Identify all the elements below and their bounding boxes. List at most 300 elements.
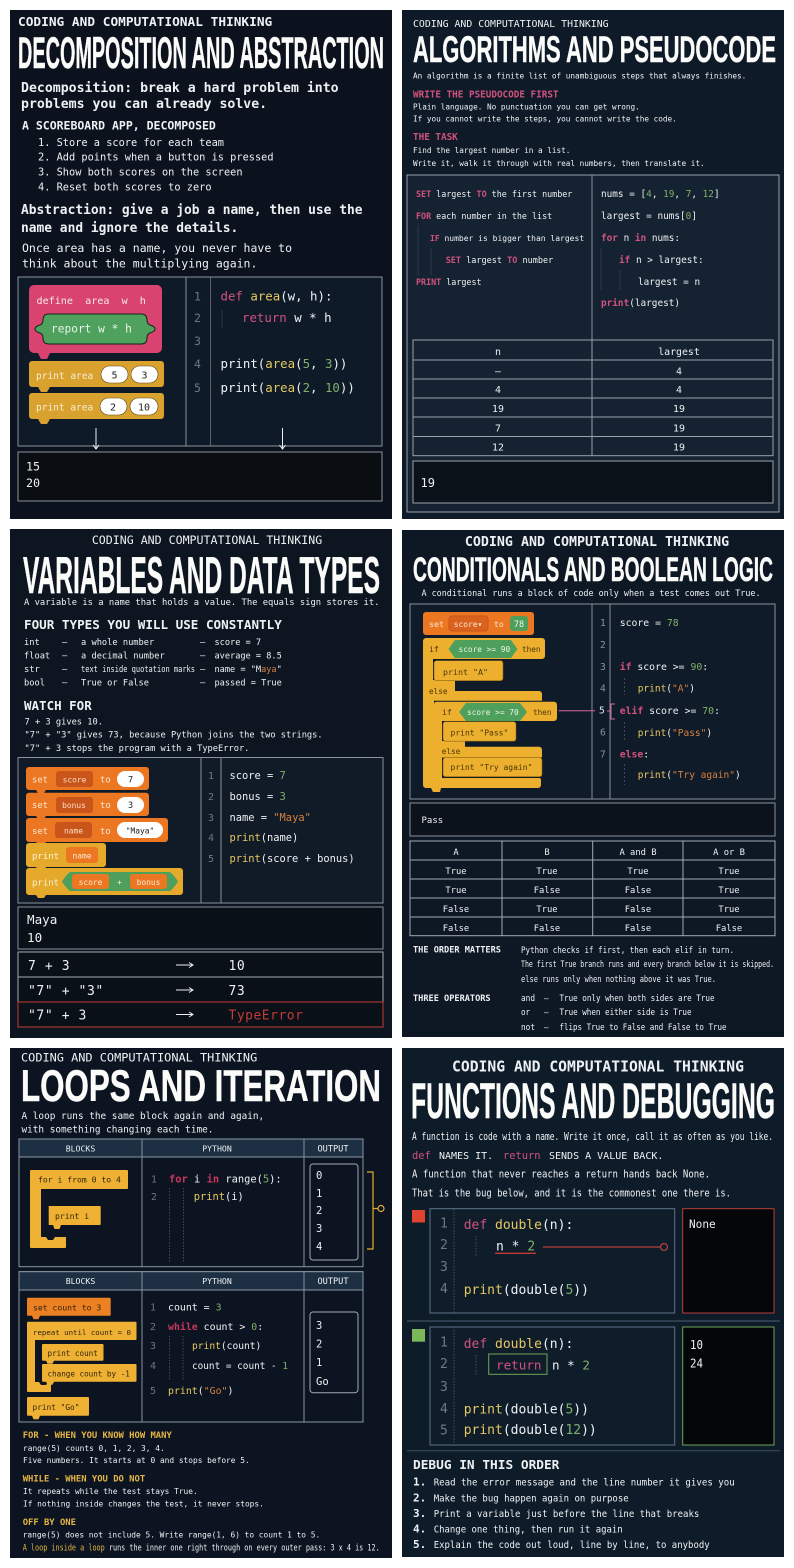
- while loop table: PYTHON: [202, 1276, 232, 1286]
- trace table: [413, 340, 773, 456]
- types table: –: [62, 665, 68, 675]
- none explanation: A function that never reaches a return hands back None.: [412, 1170, 710, 1181]
- block: print score + bonus: [26, 868, 183, 898]
- block: print name: [26, 843, 106, 870]
- block: set bonus: to: [100, 801, 111, 811]
- truth table: False: [534, 886, 560, 896]
- pseudocode text: Plain language. No punctuation you can get wrong.: [413, 103, 640, 112]
- python while loop: [150, 1303, 288, 1397]
- pseudocode: PRINT largest: [416, 277, 482, 287]
- buggy code box: n * 2: [496, 1240, 535, 1255]
- fixed output: [683, 1327, 774, 1445]
- block: inner if: [442, 703, 552, 721]
- block: print name: print: [32, 852, 59, 862]
- truth table: False: [625, 886, 651, 896]
- line numbers: 5: [599, 705, 605, 716]
- pseudocode: [416, 189, 584, 287]
- note: for: [23, 1431, 250, 1465]
- python while loop: 2: [150, 1322, 156, 1333]
- block: else: else: [429, 687, 448, 696]
- python for loop: print(i): [194, 1191, 244, 1203]
- block: define area: define area w h: [36, 296, 146, 307]
- truth table: True: [445, 886, 467, 896]
- kicker: CODING AND COMPUTATIONAL THINKING: [92, 533, 322, 547]
- note: the order matters: THE ORDER MATTERS: [413, 946, 501, 956]
- python while loop: 1: [150, 1303, 156, 1314]
- text: VARIABLES AND DATA TYPES: [23, 547, 380, 605]
- types table: int: [24, 638, 40, 648]
- none explanation: [412, 1170, 731, 1200]
- python for loop: 2: [151, 1192, 157, 1203]
- types table: passed = True: [214, 679, 282, 689]
- icon: red square: [412, 1210, 425, 1222]
- for loop table: BLOCKS: [66, 1144, 95, 1154]
- truth table: A and B: [619, 848, 657, 858]
- types table: True or False: [81, 679, 149, 689]
- truth table: True: [536, 867, 558, 877]
- buggy code box: 3: [440, 1260, 448, 1275]
- note: three operators: not: [521, 1022, 535, 1032]
- fixed code box: 2: [440, 1357, 448, 1372]
- block: set name: set: [32, 827, 48, 837]
- note: the order matters: Python checks if first, then each elif in turn.: [521, 945, 734, 955]
- output list: 3: [316, 1223, 322, 1235]
- block: print Go: [27, 1397, 89, 1419]
- python while loop: 5: [150, 1386, 156, 1397]
- intro: A conditional runs a block of code only when a test comes out True.: [421, 588, 761, 598]
- python code: bonus = 3: [230, 791, 286, 803]
- line numbers: 4: [194, 357, 201, 371]
- scoreboard list: 4. Reset both scores to zero: [38, 182, 212, 194]
- line numbers: 2: [600, 640, 606, 651]
- output list: 1: [316, 1188, 322, 1200]
- block: set score: [423, 612, 534, 635]
- fixed code box: print(double(5)): [464, 1402, 589, 1417]
- truth table: True: [718, 886, 740, 896]
- trace table: 19: [673, 442, 685, 454]
- abstraction note: think about the multiplying again.: [22, 257, 257, 271]
- heading: watch for: WATCH FOR: [24, 698, 92, 713]
- block: set bonus: 3: [128, 801, 133, 811]
- debug list: 1.: [413, 1476, 426, 1489]
- scoreboard list: 1. Store a score for each team: [38, 137, 224, 149]
- block: set score: set: [429, 619, 444, 629]
- task text: Write it, walk it through with real numbers, then translate it.: [413, 159, 705, 168]
- block: print score + bonus: print: [32, 878, 59, 888]
- python area function: [220, 289, 355, 395]
- arrow: python to output: [280, 428, 286, 449]
- block: for loop: print i: [55, 1211, 89, 1221]
- output box: Maya: [27, 912, 57, 927]
- output list: 4: [316, 1241, 322, 1253]
- note: three operators: True only when both sides are True: [560, 993, 714, 1003]
- block: print Try again: print "Try again": [450, 763, 532, 772]
- block: print A: [434, 661, 503, 681]
- for loop table: [19, 1139, 363, 1267]
- watch for text: "7" + 3 stops the program with a TypeError.: [24, 744, 249, 754]
- bracket: output count: [367, 1172, 384, 1249]
- output box: [18, 907, 383, 949]
- truth table: True: [536, 905, 558, 915]
- output list: 3: [316, 1320, 322, 1332]
- block: set score: to: [494, 620, 504, 629]
- line numbers: 3: [208, 813, 214, 824]
- buggy output: [683, 1209, 774, 1313]
- block: print Go: print "Go": [32, 1403, 79, 1412]
- intro: An algorithm is a finite list of unambiguous steps that always finishes.: [413, 72, 746, 81]
- intro: A loop runs the same block again and again,: [22, 1111, 264, 1122]
- line numbers: 6: [600, 728, 606, 739]
- debug list: Explain the code out loud, line by line, to anybody: [434, 1540, 710, 1551]
- python while loop: 4: [150, 1361, 156, 1372]
- scoreboard list: 2. Add points when a button is pressed: [38, 152, 274, 164]
- code comparison box: [18, 277, 382, 449]
- truth table: True: [627, 867, 649, 877]
- debug list: Make the bug happen again on purpose: [434, 1493, 629, 1504]
- kicker: CODING AND COMPUTATIONAL THINKING: [465, 535, 729, 550]
- block: print score + bonus: +: [117, 878, 122, 887]
- block: print area 5 3: print area: [36, 371, 93, 382]
- fixed code box: 5: [440, 1424, 448, 1439]
- arrow: blocks to output: [93, 428, 99, 449]
- block: set score: to: [100, 776, 111, 786]
- block: repeat until: repeat until count = 0: [33, 1328, 131, 1337]
- python for loop: 1: [151, 1175, 157, 1186]
- block: define area: report w * h: [51, 323, 132, 336]
- fixed code box: 4: [440, 1402, 448, 1417]
- expression table: "7" + "3": [28, 984, 104, 999]
- trace table: 4: [676, 366, 682, 378]
- panel: loops and iteration: [10, 1048, 392, 1558]
- output box: Pass: [422, 816, 443, 826]
- output list: [310, 1164, 358, 1260]
- pseudocode text: If you cannot write the steps, you cannot write the code.: [413, 115, 677, 124]
- buggy output: None: [689, 1218, 716, 1231]
- types table: –: [62, 679, 68, 689]
- truth table: A: [453, 848, 459, 858]
- note: off by one: OFF BY ONE: [23, 1518, 76, 1528]
- line numbers: 5: [208, 854, 214, 865]
- trace table: 4: [676, 385, 682, 396]
- block: set count: [27, 1298, 111, 1319]
- panel: conditionals and boolean logic: [402, 530, 784, 1037]
- python for loop: [151, 1174, 282, 1262]
- truth table: A or B: [713, 848, 745, 858]
- block: if row text: score >= 90: [458, 645, 510, 654]
- python code: name = "Maya": [230, 812, 311, 824]
- def and return note: return: [503, 1150, 541, 1162]
- buggy code box: [430, 1209, 675, 1313]
- trace table: 19: [673, 424, 685, 434]
- types table: bool: [24, 679, 45, 689]
- block: repeat until: [27, 1322, 136, 1392]
- python: print(largest): [601, 298, 680, 309]
- note: for: Five numbers. It starts at 0 and stops before 5.: [23, 1456, 250, 1465]
- types table: –: [200, 679, 206, 689]
- output list: 2: [316, 1339, 322, 1351]
- block: print area 2 10: 2: [110, 402, 116, 414]
- block: print Pass: [443, 722, 516, 741]
- fixed code box: 1: [440, 1336, 448, 1351]
- block: set name: name: [64, 826, 83, 836]
- for loop table: PYTHON: [202, 1144, 232, 1154]
- block: print A: print "A": [443, 667, 488, 677]
- trace table: –: [495, 366, 501, 378]
- heading: four types: FOUR TYPES YOU WILL USE CONSTANTLY: [24, 617, 282, 632]
- types table: score = 7: [214, 638, 261, 648]
- debug list: [413, 1476, 735, 1551]
- python: largest = nums[0]: [601, 211, 697, 222]
- python code: print("Try again"): [638, 770, 741, 781]
- note: while: It repeats while the test stays True.: [23, 1487, 198, 1496]
- truth table: False: [443, 924, 469, 934]
- block: set count: set count to 3: [33, 1303, 101, 1313]
- fixed code box: return: [496, 1357, 542, 1372]
- block: print area 2 10: print area: [36, 403, 93, 414]
- watch for text: "7" + "3" gives 73, because Python joins the two strings.: [24, 731, 323, 741]
- line numbers: 1: [600, 618, 606, 629]
- python code: score = 78: [620, 618, 679, 629]
- python code: print(name): [230, 832, 298, 844]
- trace table: largest: [658, 347, 700, 358]
- block: print area 5 3: [29, 360, 164, 392]
- line numbers: 7: [600, 749, 606, 760]
- decomposition definition: problems you can already solve.: [21, 97, 267, 112]
- def and return note: NAMES IT.: [439, 1151, 493, 1162]
- note: while: If nothing inside changes the test, it never stops.: [23, 1500, 264, 1509]
- abstraction note: Once area has a name, you never have to: [22, 241, 292, 255]
- line numbers: 3: [194, 334, 201, 348]
- note: three operators: and: [521, 993, 535, 1003]
- types table: a whole number: [81, 638, 154, 648]
- block: nested if else: [423, 638, 557, 792]
- types table: [24, 638, 282, 689]
- block: print Try again: [443, 758, 542, 777]
- output box: [410, 803, 775, 836]
- kicker: CODING AND COMPUTATIONAL THINKING: [413, 19, 609, 30]
- debug list: 5.: [413, 1538, 426, 1551]
- note: off by one: [23, 1518, 380, 1553]
- output list: Go: [316, 1376, 329, 1388]
- python code: print(score + bonus): [230, 853, 355, 865]
- decomposition definition: Decomposition: break a hard problem into: [21, 80, 339, 96]
- heading: write pseudocode: WRITE THE PSEUDOCODE FIRST: [413, 90, 559, 101]
- note: the order matters: [413, 945, 774, 984]
- python while loop: print("Go"): [168, 1386, 233, 1397]
- while loop table: [19, 1272, 363, 1422]
- abstraction definition: name and ignore the details.: [21, 221, 238, 236]
- types table: –: [200, 652, 206, 662]
- truth table: False: [625, 924, 651, 934]
- note: while: WHILE - WHEN YOU DO NOT: [23, 1475, 145, 1485]
- python area function: print(area(5, 3)): [220, 356, 347, 371]
- expression table: 10: [228, 959, 245, 974]
- pseudocode: SET largest TO number: [446, 256, 553, 266]
- block: set score: score: [63, 776, 87, 784]
- block: set score: 78: [514, 620, 524, 630]
- types table: –: [62, 652, 68, 662]
- truth table: B: [544, 848, 550, 858]
- types table: a decimal number: [81, 652, 165, 662]
- fixed code box: 3: [440, 1380, 448, 1395]
- while loop table: BLOCKS: [66, 1276, 95, 1286]
- python while loop: count = 3: [168, 1303, 222, 1314]
- expression table: 7 + 3: [28, 959, 70, 974]
- truth table: True: [718, 867, 740, 877]
- python: for n in nums:: [601, 233, 680, 244]
- debug list: Change one thing, then run it again: [434, 1525, 623, 1536]
- note: three operators: [413, 993, 726, 1032]
- note: off by one: A loop inside a loop runs the inner one right through on every outer pass: 3 x 4 is 12.: [23, 1543, 380, 1553]
- code comparison box: [407, 175, 779, 512]
- python code: [230, 770, 355, 865]
- block: set name: "Maya": [126, 826, 154, 836]
- python while loop: count = count - 1: [192, 1361, 288, 1372]
- abstraction definition: Abstraction: give a job a name, then use the: [21, 203, 363, 218]
- output box: 19: [420, 476, 435, 490]
- trace table: 4: [495, 385, 501, 396]
- block: print area 5 3: 3: [141, 370, 148, 382]
- types table: text inside quotation marks: [81, 665, 195, 675]
- output box: [413, 461, 773, 503]
- types table: –: [200, 665, 206, 675]
- block: for loop: [30, 1170, 128, 1248]
- note: three operators: or: [521, 1007, 530, 1017]
- note: for: range(5) counts 0, 1, 2, 3, 4.: [23, 1444, 165, 1453]
- debug list: 4.: [413, 1523, 426, 1536]
- def and return note: SENDS A VALUE BACK.: [549, 1151, 663, 1162]
- block: print count: print count: [48, 1349, 98, 1358]
- intro: with something changing each time.: [22, 1125, 213, 1136]
- block: set score: 7: [128, 776, 133, 786]
- block: set bonus: bonus: [62, 801, 86, 810]
- python code: print("A"): [638, 684, 695, 695]
- python: [601, 189, 720, 309]
- line numbers: 3: [600, 662, 606, 673]
- code comparison box: [18, 758, 383, 903]
- output list: [310, 1312, 358, 1393]
- heading: the task: THE TASK: [413, 132, 458, 143]
- note: three operators: flips True to False and False to True: [560, 1022, 726, 1032]
- block: set bonus: set: [32, 801, 48, 811]
- line numbers: 2: [208, 792, 214, 803]
- block: inner if: then: [533, 708, 552, 717]
- python code: print("Pass"): [638, 728, 712, 739]
- block: define area: [29, 285, 162, 359]
- truth table: False: [443, 905, 469, 915]
- python code: score = 7: [230, 770, 286, 782]
- debug list: 2.: [413, 1491, 426, 1504]
- block: for loop: for i from 0 to 4: [38, 1175, 121, 1185]
- for loop table: OUTPUT: [317, 1145, 349, 1155]
- output box: [18, 452, 382, 501]
- block: print area 2 10: 10: [138, 402, 150, 414]
- python: nums = [4, 19, 7, 12]: [601, 189, 720, 200]
- line numbers: 1: [208, 771, 214, 782]
- output box: 10: [27, 930, 42, 945]
- intro: A variable is a name that holds a value. The equals sign stores it.: [24, 598, 379, 608]
- note: three operators: –: [544, 1008, 549, 1017]
- trace table: 19: [492, 404, 504, 415]
- block: set score: set: [32, 776, 48, 786]
- note: three operators: –: [544, 994, 549, 1003]
- block: print area 2 10: [29, 393, 164, 424]
- panel: functions and debugging: [402, 1048, 784, 1557]
- block: inner if: score >= 70: [467, 708, 519, 717]
- note: off by one: range(5) does not include 5. Write range(1, 6) to count 1 to 5.: [23, 1531, 320, 1540]
- line numbers: 1: [194, 290, 201, 304]
- types table: float: [24, 652, 50, 662]
- line numbers: 4: [600, 684, 606, 695]
- truth table: False: [625, 905, 651, 915]
- scoreboard list: 3. Show both scores on the screen: [38, 167, 243, 179]
- block: inner if: if: [442, 707, 452, 717]
- python area function: print(area(2, 10)): [220, 380, 355, 395]
- debug list: Print a variable just before the line that breaks: [434, 1509, 699, 1520]
- output box: 15: [26, 460, 40, 474]
- block: print name: name: [72, 852, 92, 860]
- note: three operators: –: [544, 1023, 549, 1032]
- kicker: CODING AND COMPUTATIONAL THINKING: [21, 1051, 257, 1065]
- fixed code box: def double(n):: [464, 1337, 573, 1352]
- panel: algorithms and pseudocode: [402, 10, 784, 519]
- expression table: "7" + 3: [28, 1008, 87, 1024]
- fixed code box: [430, 1327, 675, 1445]
- types table: average = 8.5: [214, 652, 282, 662]
- python: if n > largest:: [619, 255, 704, 266]
- output list: 2: [316, 1205, 322, 1217]
- block: inner else: else: [442, 747, 461, 756]
- truth table: [410, 841, 775, 936]
- buggy code box: print(double(5)): [464, 1283, 589, 1298]
- heading: debug order: DEBUG IN THIS ORDER: [413, 1458, 560, 1473]
- note: for: FOR - WHEN YOU KNOW HOW MANY: [23, 1431, 172, 1441]
- python for loop: for i in range(5):: [169, 1174, 282, 1186]
- kicker: CODING AND COMPUTATIONAL THINKING: [452, 1058, 744, 1076]
- block: print Pass: print "Pass": [450, 729, 508, 738]
- pseudocode: SET largest TO the first number: [416, 189, 572, 199]
- buggy code box: 2: [440, 1238, 448, 1253]
- fixed output: 10: [690, 1338, 703, 1352]
- title: LOOPS AND ITERATION: [21, 1062, 381, 1111]
- panel: decomposition and abstraction: [10, 10, 392, 519]
- output list: 0: [316, 1170, 322, 1182]
- trace table: 7: [495, 424, 501, 434]
- truth table: True: [445, 867, 467, 877]
- truth table: False: [534, 924, 560, 934]
- line numbers: 5: [194, 381, 201, 395]
- fixed code box: print(double(12)): [464, 1423, 597, 1438]
- line numbers: 4: [208, 833, 214, 844]
- expression table: 73: [228, 984, 245, 999]
- block: set name: to: [100, 827, 111, 837]
- expression table: [18, 952, 383, 1027]
- output list: 1: [316, 1357, 322, 1369]
- python code: if score >= 90:: [620, 661, 708, 673]
- types table: name = "Maya": [214, 665, 282, 675]
- fixed code box: n * 2: [552, 1357, 590, 1372]
- buggy code box: 4: [440, 1282, 448, 1297]
- block: set score: [26, 767, 149, 793]
- highlight: return: [489, 1354, 547, 1374]
- block: if row text: [429, 640, 541, 658]
- truth table: True: [718, 905, 740, 915]
- none explanation: That is the bug below, and it is the commonest one there is.: [412, 1189, 731, 1200]
- connector: block to elif line: [559, 704, 615, 719]
- block: set bonus: [26, 793, 149, 819]
- note: the order matters: else runs only when nothing above it was True.: [521, 974, 716, 984]
- expression table: TypeError: [228, 1008, 303, 1024]
